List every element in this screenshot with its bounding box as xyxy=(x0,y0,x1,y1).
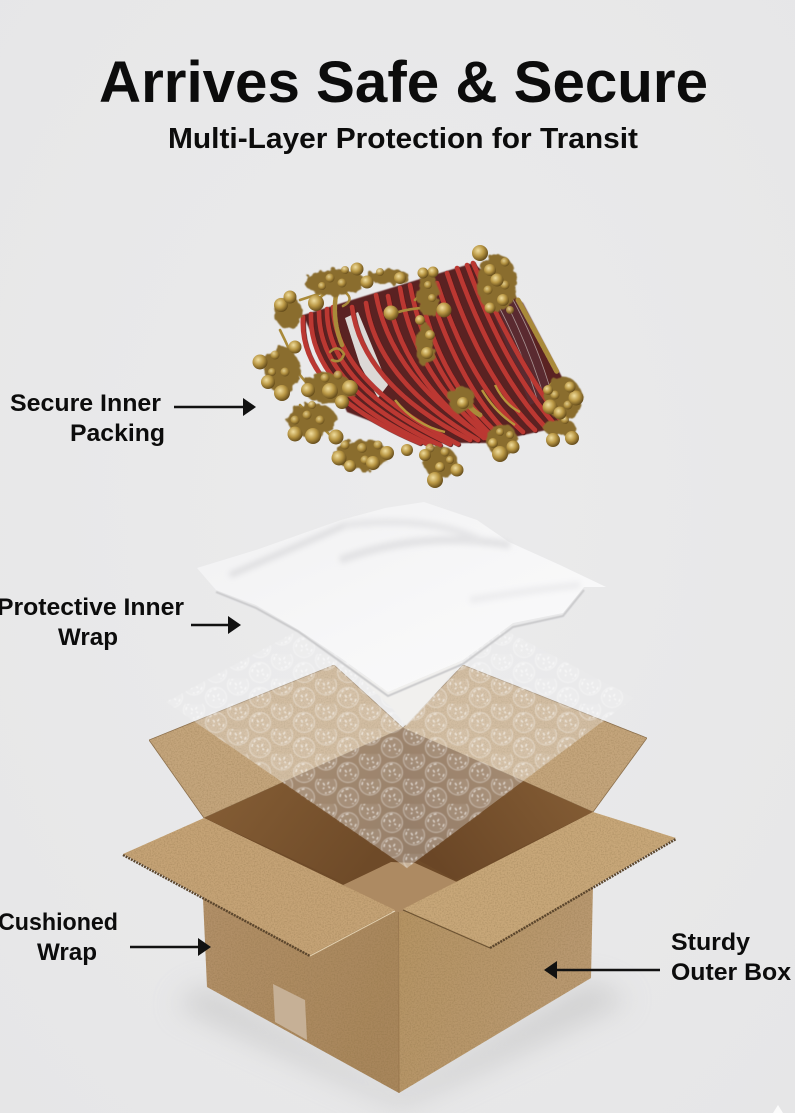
label: sturdy outer box xyxy=(671,929,792,986)
corner crease xyxy=(398,912,400,1093)
right front face xyxy=(398,885,593,1093)
left front flap xyxy=(123,818,395,955)
illustration: cardboard box interior xyxy=(149,665,647,1108)
gold chains and clusters xyxy=(280,276,564,435)
label: secure inner packing: Packing xyxy=(70,420,165,447)
label: secure inner packing xyxy=(10,390,165,447)
label: protective inner wrap: Protective Inner xyxy=(0,594,184,621)
tissue sheet xyxy=(197,502,606,692)
arrow: cushioned wrap xyxy=(130,938,211,956)
gold bells xyxy=(252,245,584,488)
label: cushioned wrap: Wrap xyxy=(37,939,97,966)
inner right wall xyxy=(403,728,593,880)
interior backing xyxy=(204,728,593,914)
red bangles xyxy=(303,263,562,445)
box ground shadow xyxy=(175,980,630,1108)
box floor xyxy=(343,862,457,914)
label: cushioned wrap: Cushioned xyxy=(0,909,118,936)
label: cushioned wrap xyxy=(0,909,118,966)
label: sturdy outer box: Outer Box xyxy=(671,959,792,986)
tape xyxy=(273,984,307,1040)
lower tissue layer xyxy=(341,660,463,726)
subtitle: Multi-Layer Protection for Transit xyxy=(168,123,638,155)
gold filler bells xyxy=(268,258,572,464)
tissue shadow xyxy=(216,590,584,696)
bangle stack inner shadow xyxy=(303,263,562,443)
label: sturdy outer box: Sturdy xyxy=(671,929,751,956)
inner left wall xyxy=(204,728,403,883)
tissue folds xyxy=(230,522,580,600)
left front face xyxy=(203,898,399,1093)
gold inlay bangles xyxy=(395,385,520,432)
right flap crease xyxy=(403,910,490,948)
right front flap xyxy=(403,812,676,947)
bubble sheet xyxy=(166,575,634,868)
left flap crease xyxy=(310,911,395,956)
illustration: bubble wrap xyxy=(166,575,634,868)
right flap corrugated edge xyxy=(490,839,676,948)
illustration: tissue paper inner wrap xyxy=(197,502,606,726)
corner mark xyxy=(773,1105,783,1113)
back right flap xyxy=(403,665,647,812)
arrow: sturdy outer box xyxy=(544,961,660,979)
illustration: red and gold bangles xyxy=(252,245,584,488)
label: secure inner packing: Secure Inner xyxy=(10,390,161,417)
illustration: box front xyxy=(123,812,676,1093)
bubble texture xyxy=(166,575,634,868)
arrow: secure inner packing xyxy=(174,398,256,416)
title: Arrives Safe & Secure xyxy=(99,50,708,115)
back left flap xyxy=(149,665,403,818)
left flap corrugated edge xyxy=(123,855,310,956)
label: protective inner wrap: Wrap xyxy=(58,624,118,651)
gold cluster bodies xyxy=(264,254,582,478)
arrow: protective inner wrap xyxy=(191,616,241,634)
label: protective inner wrap xyxy=(0,594,184,651)
